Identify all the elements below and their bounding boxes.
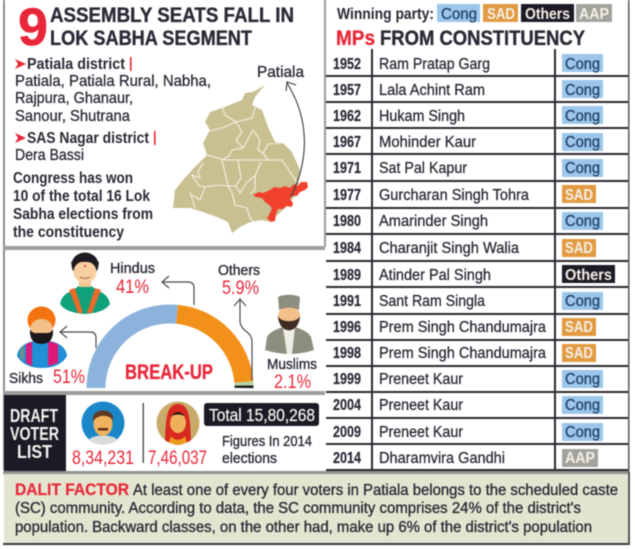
row 1971 xyxy=(333,159,603,177)
row 1996: SAD xyxy=(565,319,593,336)
row 1967: 1967 xyxy=(333,134,361,151)
row 1957 xyxy=(333,80,603,99)
stat: female voters: 7,46,037 xyxy=(148,448,207,469)
row 2009: Preneet Kaur xyxy=(379,424,464,441)
row 1991: Sant Ram Singla xyxy=(379,293,485,310)
row 2009: Cong xyxy=(565,424,600,441)
panel: draft voter list heading: VOTER xyxy=(10,424,59,444)
row 1967: Mohinder Kaur xyxy=(379,134,477,151)
row 1977 xyxy=(333,185,596,204)
row 1952 xyxy=(333,54,603,73)
row 2004: 2004 xyxy=(333,397,361,414)
row 1962 xyxy=(333,106,603,125)
row 1971: 1971 xyxy=(333,160,361,177)
note: figures in 2014 elections: Figures In 2014 xyxy=(222,433,312,450)
panel: Dalit factor: (SC) community. According to data, the SC community comprises 24% of the district's xyxy=(15,500,581,517)
text block: assembly segments by district: Rajpura, Ghanaur, xyxy=(15,90,133,107)
row 1980: Cong xyxy=(565,213,600,230)
row 2009 xyxy=(333,423,603,441)
arrow: to Hindus xyxy=(162,276,194,305)
row 1962: 1962 xyxy=(333,108,361,125)
chart title: BREAK-UP: BREAK-UP xyxy=(125,360,213,384)
legend: winning party: AAP xyxy=(579,6,609,23)
row 1989: 1989 xyxy=(333,267,361,284)
row 1989: Others xyxy=(565,267,612,284)
label: Muslims 2.1%: 2.1% xyxy=(274,372,311,393)
row 1967: Cong xyxy=(565,134,600,151)
row 2004 xyxy=(333,396,603,414)
text block: Congress record xyxy=(13,170,153,241)
panel: draft voter list heading xyxy=(4,395,66,473)
row 1984: 1984 xyxy=(333,240,361,257)
row 1989 xyxy=(333,265,615,284)
row 1991: Cong xyxy=(565,293,600,310)
row 1952: Cong xyxy=(565,56,600,73)
row 1962: Cong xyxy=(565,108,600,125)
row 1952: Ram Pratap Garg xyxy=(379,56,490,73)
note: figures in 2014 elections: elections xyxy=(222,450,277,467)
row 1998 xyxy=(333,344,596,362)
row 1999 xyxy=(333,370,603,388)
title: 9 assembly seats: ASSEMBLY SEATS FALL IN xyxy=(50,3,294,27)
arrow: label to Patiala xyxy=(286,82,304,197)
row 2014: AAP xyxy=(565,450,595,467)
row 1977: 1977 xyxy=(333,187,361,204)
row 1998: SAD xyxy=(565,345,593,362)
label: Sikhs 51%: 51% xyxy=(53,367,85,388)
row 1977: SAD xyxy=(565,187,593,204)
legend: winning party: Winning party: xyxy=(337,6,434,23)
label: Hindus 41% xyxy=(110,260,155,298)
heading: MPs from constituency: MPs xyxy=(336,26,375,50)
row 1971: Cong xyxy=(565,160,600,177)
text block: assembly segments by district: Patiala district xyxy=(27,56,125,73)
row 1998: 1998 xyxy=(333,345,361,362)
icon: Sikh man xyxy=(17,306,67,368)
text block: assembly segments by district xyxy=(15,56,211,164)
label: Muslims 2.1%: Muslims xyxy=(267,356,317,373)
map of Punjab with Patiala highlighted xyxy=(173,85,308,233)
row 1957: 1957 xyxy=(333,82,361,99)
title: 9 assembly seats: LOK SABHA SEGMENT xyxy=(50,26,252,50)
panel: draft voter list heading: DRAFT xyxy=(10,406,58,426)
chart: religion break-up semicircle xyxy=(96,314,244,388)
row 1996: 1996 xyxy=(333,319,361,336)
row 1996: Prem Singh Chandumajra xyxy=(379,319,546,336)
row 1991 xyxy=(333,292,603,310)
divider xyxy=(142,403,144,463)
row 2014: 2014 xyxy=(333,450,361,467)
text block: Congress record: Congress has won xyxy=(13,170,133,187)
legend: winning party: Others xyxy=(525,6,570,23)
label: Others 5.9%: Others xyxy=(218,262,260,279)
legend: winning party: SAD xyxy=(487,6,515,23)
text block: Congress record: the constituency xyxy=(13,224,124,241)
stat: male voters: 8,34,231 xyxy=(72,448,134,469)
label: Others 5.9% xyxy=(218,262,260,299)
row 1962: Hukam Singh xyxy=(379,108,465,125)
row 1999: Cong xyxy=(565,371,600,388)
icon: female voter xyxy=(156,402,200,445)
row 1991: 1991 xyxy=(333,293,361,310)
table: MPs by year xyxy=(326,49,628,472)
panel: Dalit factor: DALIT FACTOR xyxy=(15,480,129,499)
row 2004: Preneet Kaur xyxy=(379,397,464,414)
text block: assembly segments by district: Dera Bassi xyxy=(15,147,84,164)
row 1971: Sat Pal Kapur xyxy=(379,160,468,177)
panel: Dalit factor: population. Backward classes, on the other had, make up 6% of the district's population xyxy=(15,519,592,536)
title: 9 assembly seats xyxy=(18,0,294,57)
row 1952: 1952 xyxy=(333,56,361,73)
label: Others 5.9%: 5.9% xyxy=(222,278,259,299)
icon: male voter xyxy=(82,402,124,444)
row 1984 xyxy=(333,239,596,257)
legend: winning party xyxy=(337,4,612,23)
text block: assembly segments by district: SAS Nagar district xyxy=(27,130,149,147)
row 1989: Atinder Pal Singh xyxy=(379,267,491,284)
row 1980 xyxy=(333,212,603,230)
row 1977: Gurcharan Singh Tohra xyxy=(379,187,529,204)
row 1984: Charanjit Singh Walia xyxy=(379,240,519,257)
total voters pill: Total 15,80,268 xyxy=(209,405,315,425)
label: Sikhs 51% xyxy=(9,367,85,388)
row 1967 xyxy=(333,133,603,151)
row 1996 xyxy=(333,318,596,336)
panel: draft voter list heading: LIST xyxy=(17,442,52,462)
row 2014: Dharamvira Gandhi xyxy=(379,450,505,467)
map label: Patiala: Patiala xyxy=(257,64,304,81)
text block: Congress record: 10 of the total 16 Lok xyxy=(13,188,150,205)
row 1984: SAD xyxy=(565,240,593,257)
panel: Dalit factor xyxy=(3,471,630,545)
label: Muslims 2.1% xyxy=(267,356,317,393)
icon: Muslim man xyxy=(265,295,314,354)
label: Sikhs 51%: Sikhs xyxy=(9,370,43,387)
icon: Hindu man xyxy=(60,252,110,314)
heading: MPs from constituency: FROM CONSTITUENCY xyxy=(380,26,585,50)
row 1980: Amarinder Singh xyxy=(379,213,488,230)
label: Hindus 41%: 41% xyxy=(116,277,149,298)
note: figures in 2014 elections xyxy=(222,433,312,467)
legend: winning party: Cong xyxy=(441,6,477,23)
text block: Congress record: Sabha elections from xyxy=(13,206,153,223)
label: Hindus 41%: Hindus xyxy=(110,260,155,277)
row 2014 xyxy=(333,449,598,467)
row 1980: 1980 xyxy=(333,213,361,230)
row 1957: Cong xyxy=(565,82,600,99)
row 1957: Lala Achint Ram xyxy=(379,82,485,99)
row 1998: Prem Singh Chandumajra xyxy=(379,345,546,362)
arrow: to Sikhs xyxy=(60,326,96,348)
text block: assembly segments by district: Patiala, Patiala Rural, Nabha, xyxy=(15,73,211,90)
row 1999: 1999 xyxy=(333,371,361,388)
row 2004: Cong xyxy=(565,397,600,414)
row 2009: 2009 xyxy=(333,424,361,441)
text block: assembly segments by district: Sanour, Shutrana xyxy=(15,108,130,125)
arrow: to Others xyxy=(234,299,252,380)
row 1999: Preneet Kaur xyxy=(379,371,464,388)
